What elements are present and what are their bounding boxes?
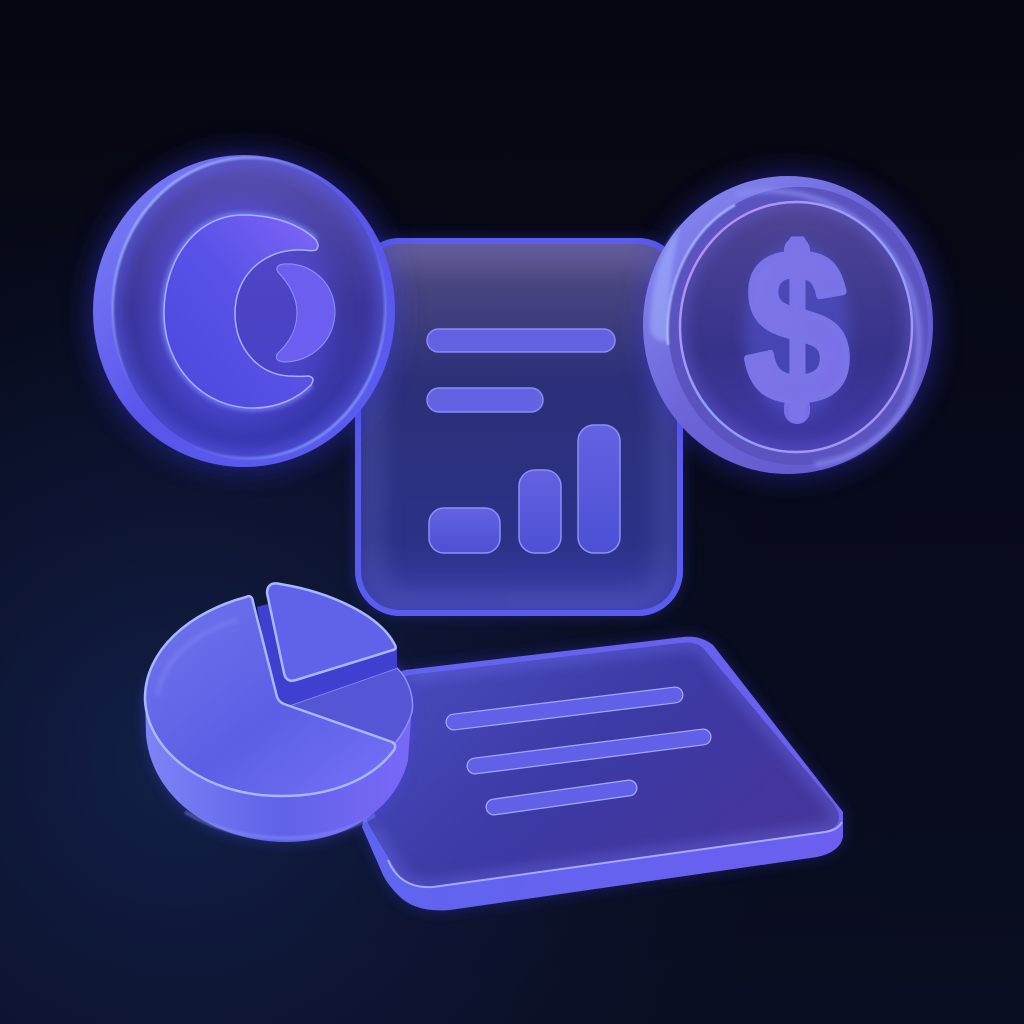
label: dollar sign: $ bbox=[745, 205, 849, 449]
text line: document second line bbox=[427, 388, 543, 412]
icon: crescent moon coin bbox=[91, 153, 397, 469]
bar chart: three rising bars bbox=[429, 425, 620, 553]
text line: card first line bbox=[454, 695, 675, 722]
pie body side bbox=[145, 693, 412, 842]
pie large slice bbox=[145, 596, 395, 796]
icon: dollar coin bbox=[643, 174, 937, 476]
pie inner walls bbox=[257, 604, 397, 706]
panel: tilted text card bbox=[362, 637, 843, 910]
text line: card second line bbox=[475, 737, 703, 766]
chart: glass pie chart bbox=[144, 583, 412, 842]
icon: large crescent bbox=[164, 215, 318, 408]
text line: card third line bbox=[494, 788, 629, 807]
panel: report document bbox=[355, 238, 683, 616]
text line: document first line bbox=[427, 329, 615, 352]
icon: small crescent bbox=[276, 264, 335, 362]
pie back wedge bbox=[288, 668, 412, 743]
pie small slice bbox=[267, 583, 396, 681]
